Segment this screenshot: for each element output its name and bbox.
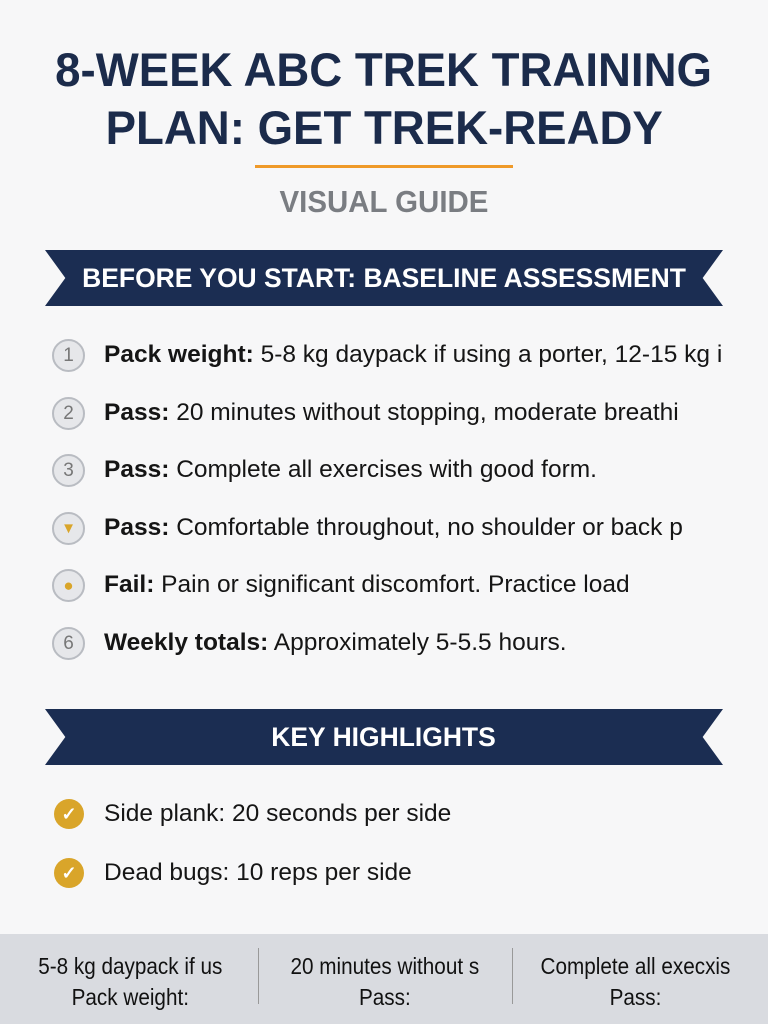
- item 6: 6: [63, 633, 74, 654]
- orange rule: [255, 165, 513, 168]
- list: baseline items: [52, 339, 722, 660]
- item 6: Weekly totals: Approximately 5-5.5 hours.: [104, 629, 567, 656]
- icon: check: [54, 858, 84, 888]
- banner: key highlights: [45, 709, 723, 765]
- item 3: 3: [63, 460, 74, 481]
- icon: check: [54, 799, 84, 829]
- footer col 2: [291, 953, 479, 1010]
- subtitle: VISUAL GUIDE: [280, 184, 488, 219]
- item 5: ●: [63, 576, 74, 595]
- footer col 3: Complete all execxis: [540, 953, 730, 979]
- highlight 1: Side plank: 20 seconds per side: [104, 800, 451, 827]
- item 1: Pack weight: 5-8 kg daypack if using a porter, 12-15 kg if: [104, 341, 722, 368]
- banner: baseline assessment: BEFORE YOU START: BASELINE ASSESSMENT: [82, 263, 686, 293]
- footer col 1: 5-8 kg daypack if us: [38, 953, 222, 979]
- icon: check: ✓: [61, 863, 77, 883]
- item 1: 1: [63, 345, 74, 366]
- footer col 3: [540, 953, 730, 1010]
- footer col 1: Pack weight:: [71, 984, 189, 1010]
- item 5: Fail: Pain or significant discomfort. Practice load: [104, 571, 630, 598]
- title: PLAN: GET TREK-READY: [105, 101, 663, 154]
- item 4: Pass: Comfortable throughout, no shoulder or back p: [104, 514, 683, 541]
- title: [56, 43, 712, 154]
- item 3: Pass: Complete all exercises with good form.: [104, 456, 597, 483]
- title: 8-WEEK ABC TREK TRAINING: [56, 43, 712, 96]
- highlight 2: Dead bugs: 10 reps per side: [104, 859, 412, 886]
- item 4: ▼: [61, 520, 76, 537]
- footer summary: [0, 934, 768, 1024]
- footer col 1: [38, 953, 222, 1010]
- footer col 2: 20 minutes without s: [291, 953, 479, 979]
- icon: check: ✓: [61, 804, 77, 824]
- footer col 3: Pass:: [609, 984, 661, 1010]
- banner: key highlights: KEY HIGHLIGHTS: [272, 722, 496, 752]
- footer col 2: Pass:: [359, 984, 411, 1010]
- banner: baseline assessment: [45, 250, 723, 306]
- item 2: Pass: 20 minutes without stopping, moderate breathi: [104, 399, 679, 426]
- item 2: 2: [63, 403, 74, 424]
